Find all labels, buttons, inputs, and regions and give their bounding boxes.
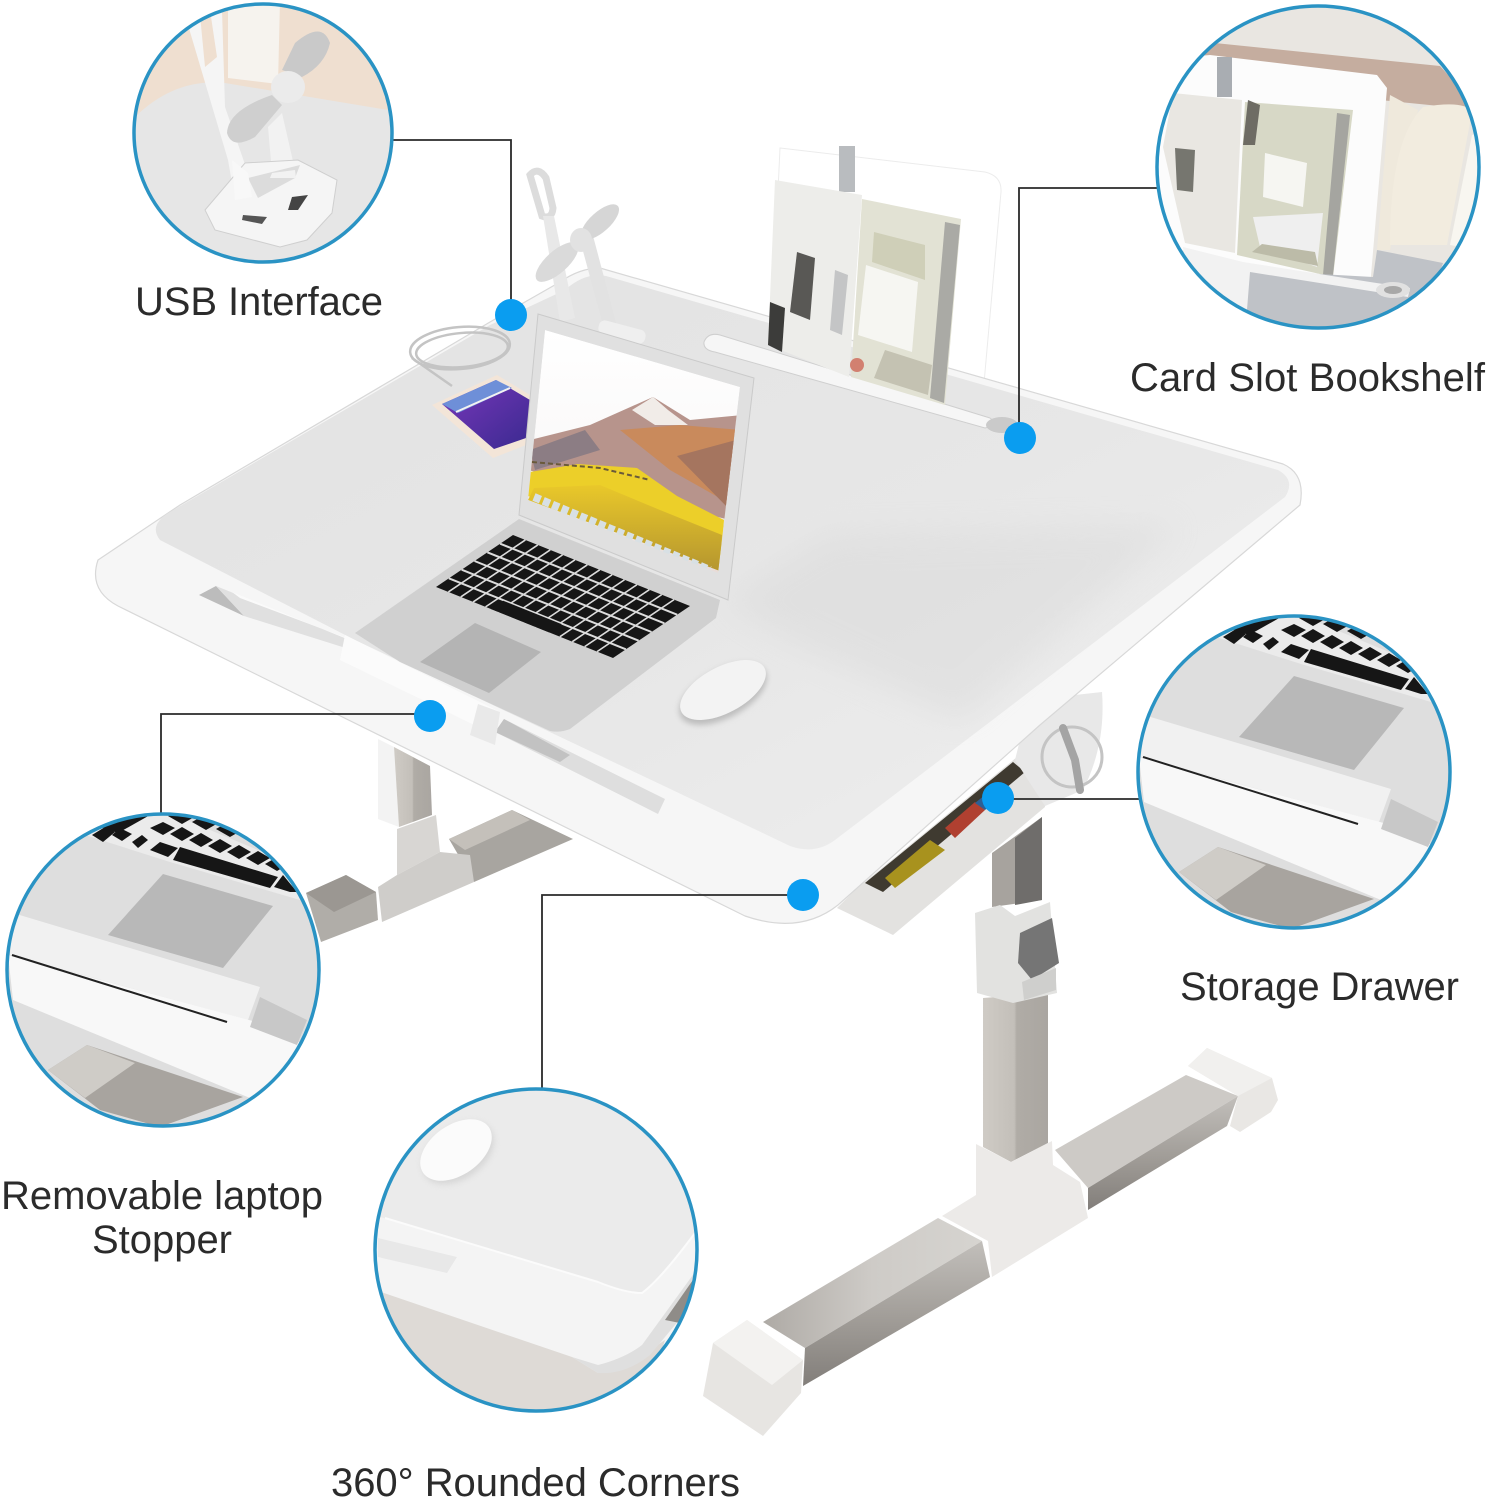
laptop lid bbox=[519, 314, 754, 600]
lens: USB interface bbox=[130, 0, 400, 270]
laptop base bbox=[355, 519, 720, 732]
lens: storage drawer bbox=[1131, 607, 1461, 942]
bookshelf board bbox=[770, 146, 1001, 417]
leg junction bbox=[942, 1141, 1088, 1277]
lens: 360 rounded corners bbox=[370, 1085, 705, 1420]
smartphone bbox=[432, 375, 530, 458]
label: Removable laptop Stopper bbox=[1, 1174, 323, 1262]
far foot cap bbox=[1188, 1048, 1278, 1132]
foot bars bbox=[763, 1075, 1238, 1386]
keyboard bbox=[436, 535, 690, 658]
label: Card Slot Bookshelf: Card Slot Bookshelf bbox=[1130, 356, 1486, 400]
label: Storage Drawer: Storage Drawer bbox=[1180, 965, 1459, 1009]
lens: removable laptop stopper bbox=[0, 805, 330, 1140]
near foot cap bbox=[703, 1320, 803, 1436]
screen wallpaper bbox=[528, 330, 742, 573]
trackpad bbox=[420, 623, 541, 693]
board support and tilt knob bbox=[1015, 692, 1103, 806]
right front leg bbox=[703, 817, 1278, 1436]
tray surface bbox=[156, 275, 1289, 849]
lens: card slot bookshelf bbox=[1150, 0, 1489, 340]
laptop bbox=[355, 314, 754, 732]
label: Removable laptop Stopper: Removable laptop bbox=[1, 1174, 323, 1218]
storage drawer bbox=[837, 757, 1047, 935]
USB cable bbox=[408, 323, 512, 386]
label: USB Interface: USB Interface bbox=[135, 280, 383, 324]
callout lines bbox=[161, 140, 1158, 1088]
label: Removable laptop Stopper: Stopper bbox=[92, 1218, 232, 1262]
blue marker dots bbox=[414, 299, 1036, 911]
USB fan accessory bbox=[530, 171, 647, 345]
USB base bbox=[205, 160, 337, 247]
pencil and bookshelf slot bbox=[704, 334, 1018, 433]
tray board bbox=[96, 268, 1301, 923]
mouse bbox=[669, 648, 777, 738]
book bbox=[768, 180, 961, 405]
front rim slots bbox=[199, 586, 665, 814]
height clamp bbox=[975, 902, 1059, 1003]
fan blades bbox=[282, 32, 330, 77]
left rear leg bbox=[306, 739, 573, 942]
fan stem and loop bbox=[189, 12, 244, 178]
